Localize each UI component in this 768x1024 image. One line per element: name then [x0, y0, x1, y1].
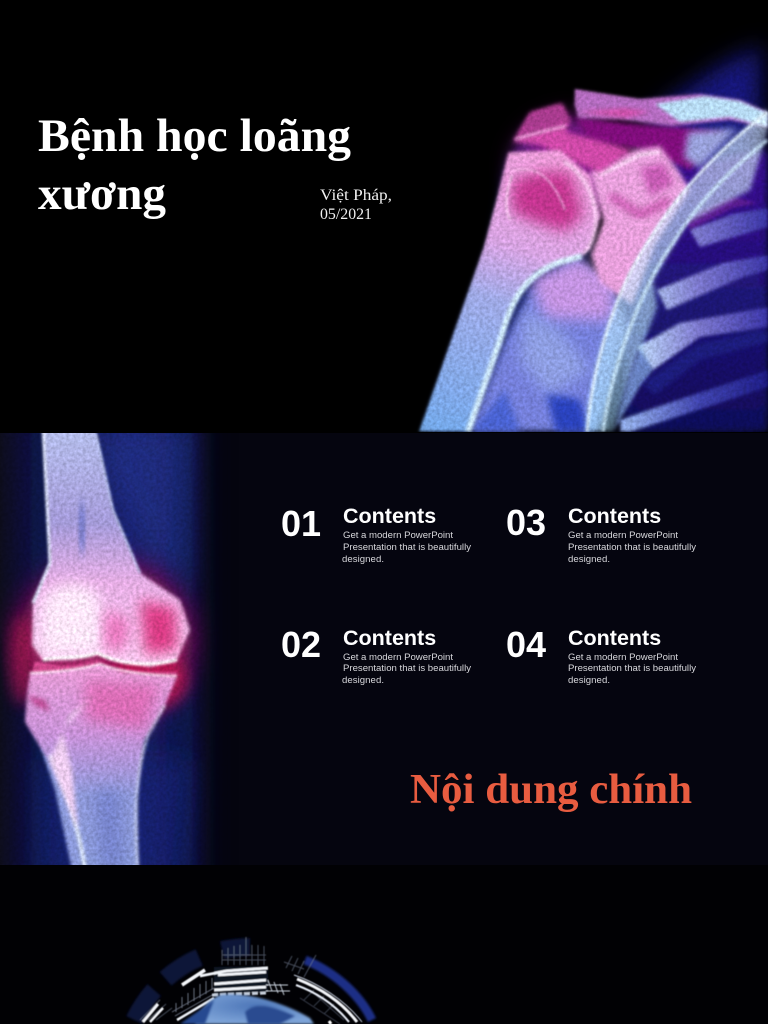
magenta shoulder halo [508, 110, 632, 220]
white ring segments [182, 970, 205, 985]
red joint glow [17, 562, 193, 718]
image: shoulder x-ray [418, 35, 768, 432]
contents item 01: Contents [343, 504, 436, 528]
contents item 04: designed. [568, 675, 610, 686]
title: Bệnh học loãng [38, 110, 352, 162]
contents item 01: Get a modern PowerPoint [343, 530, 453, 541]
contents item 04: Contents [568, 626, 661, 650]
contents item 02 [281, 624, 471, 686]
author and date: Việt Pháp, [320, 187, 392, 204]
contents item 02: Contents [343, 626, 436, 650]
dim outer ring, left and top [134, 947, 250, 1020]
author and date [320, 187, 392, 223]
tibia [25, 663, 177, 870]
contents item 01: designed. [342, 554, 384, 565]
contents item 01 [281, 503, 471, 565]
outer grid patches [140, 937, 316, 1020]
slide background: third slide [0, 865, 768, 1024]
rib bands [687, 197, 757, 230]
blue halo left of arm [425, 125, 590, 432]
contents item 04 [506, 624, 696, 686]
right inner grid [300, 990, 344, 1024]
contents item 03: Get a modern PowerPoint [568, 530, 678, 541]
humerus shaft and head [418, 150, 601, 432]
large curved ribs [585, 108, 768, 432]
acromion [512, 103, 632, 172]
contents item 02: Get a modern PowerPoint [343, 652, 453, 663]
contents item 03: Contents [568, 504, 661, 528]
contents item 03: designed. [568, 554, 610, 565]
author and date: 05/2021 [320, 206, 372, 223]
top panel [214, 966, 268, 995]
image: knee x-ray [0, 433, 216, 865]
contents item 03: Presentation that is beautifully [568, 542, 696, 553]
femur [32, 425, 190, 667]
humeral head magenta core [512, 172, 583, 232]
contents item 03 [506, 502, 696, 565]
contents item 03: 03 [506, 502, 546, 543]
soft tissue [470, 258, 628, 432]
leg soft tissue [0, 433, 216, 865]
contents item 04: 04 [506, 624, 546, 665]
contents item 01: Presentation that is beautifully [343, 542, 471, 553]
clavicle [574, 88, 768, 128]
heading: main contents: Nội dung chính [410, 767, 692, 813]
contents item 02: designed. [342, 675, 384, 686]
humerus cortex [468, 256, 582, 432]
contents item 02: Presentation that is beautifully [343, 663, 471, 674]
contents item 02: 02 [281, 624, 321, 665]
bright blue band, right [305, 960, 372, 1020]
fibula [39, 746, 81, 865]
icon: technology globe [134, 937, 372, 1024]
contents item 04: Get a modern PowerPoint [568, 652, 678, 663]
title: xương [38, 168, 166, 220]
title [38, 110, 352, 220]
scapula [590, 146, 690, 305]
purple under clavicle [575, 118, 725, 170]
joint space [32, 660, 177, 675]
slide background: title [0, 0, 768, 433]
contents item 04: Presentation that is beautifully [568, 663, 696, 674]
globe surface [195, 994, 314, 1024]
left grid wedge [172, 978, 214, 1016]
contents item 01: 01 [281, 503, 321, 544]
slide background: contents [0, 433, 768, 865]
dark blue torso glow [610, 35, 768, 432]
